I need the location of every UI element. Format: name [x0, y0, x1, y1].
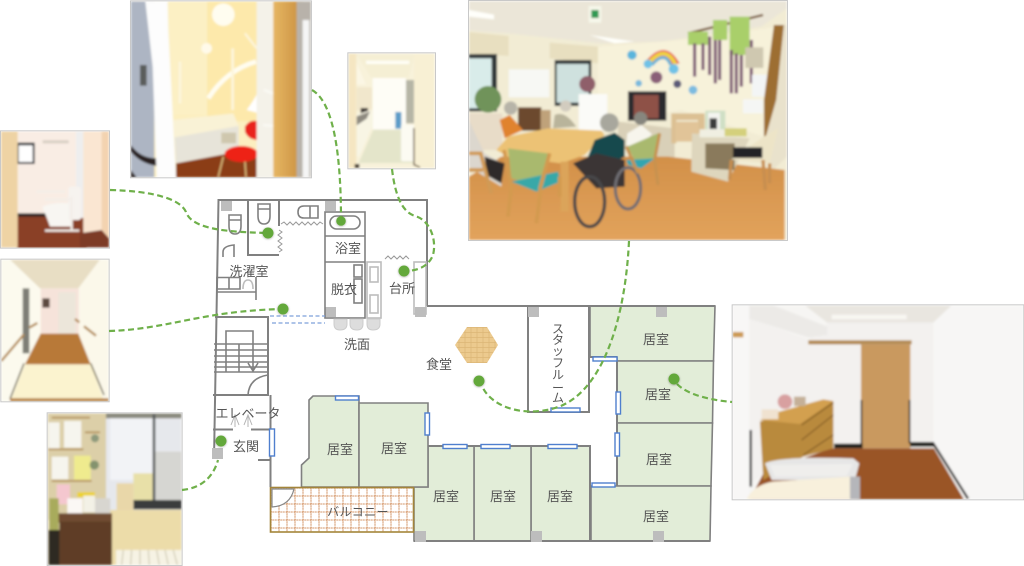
room labels: 居室	[645, 387, 671, 402]
elevator and entrance	[213, 415, 274, 460]
room labels: 洗濯室	[229, 264, 269, 279]
room labels: タ	[552, 333, 564, 347]
connector: dining room	[474, 241, 629, 411]
room labels: 居室	[547, 489, 573, 504]
photo: toilet room	[0, 131, 109, 248]
photo: bathroom	[130, 1, 311, 178]
outer walls	[214, 200, 715, 541]
room labels: 浴室	[335, 241, 361, 256]
room labels: ー	[552, 381, 564, 395]
column markers	[212, 201, 667, 542]
room labels: ム	[552, 391, 564, 405]
room labels: 脱衣	[331, 282, 357, 297]
room labels: 食堂	[426, 357, 452, 372]
room labels: ル	[552, 368, 564, 382]
room labels: 居室	[490, 489, 516, 504]
room labels: 居室	[381, 441, 407, 456]
stairs	[213, 317, 268, 395]
connector: bathroom	[312, 90, 346, 226]
room labels: 居室	[433, 489, 459, 504]
room labels: エレベータ	[215, 406, 281, 421]
bath and dressing room	[270, 212, 426, 330]
room labels: 居室	[646, 452, 672, 467]
room labels: 玄関	[233, 439, 259, 454]
room labels: ス	[552, 322, 564, 336]
room labels: 居室	[327, 442, 353, 457]
connector: kitchen	[392, 169, 434, 276]
toilet and laundry area	[216, 200, 323, 300]
room labels: 居室	[643, 332, 669, 347]
balcony	[270, 488, 414, 532]
connector: toilet	[110, 190, 274, 238]
room labels: フ	[552, 356, 564, 370]
connector: resident room	[668, 374, 732, 402]
photo: dining room	[468, 0, 787, 240]
windows	[336, 357, 620, 487]
room labels	[215, 241, 672, 524]
room labels: ッ	[552, 344, 564, 358]
connector: entrance	[182, 436, 226, 490]
photo: entrance	[47, 413, 182, 565]
photo: kitchen	[348, 53, 435, 169]
room labels: 居室	[643, 509, 669, 524]
photo: resident room	[732, 305, 1024, 500]
floor plan	[212, 200, 715, 542]
room labels: 洗面	[344, 337, 370, 352]
photo: corridor	[1, 259, 109, 402]
room labels: 台所	[389, 281, 415, 296]
balcony: バルコニー	[327, 505, 389, 519]
rooms: resident rooms	[302, 306, 715, 541]
dining table	[455, 327, 498, 363]
connector: corridor	[109, 304, 288, 331]
